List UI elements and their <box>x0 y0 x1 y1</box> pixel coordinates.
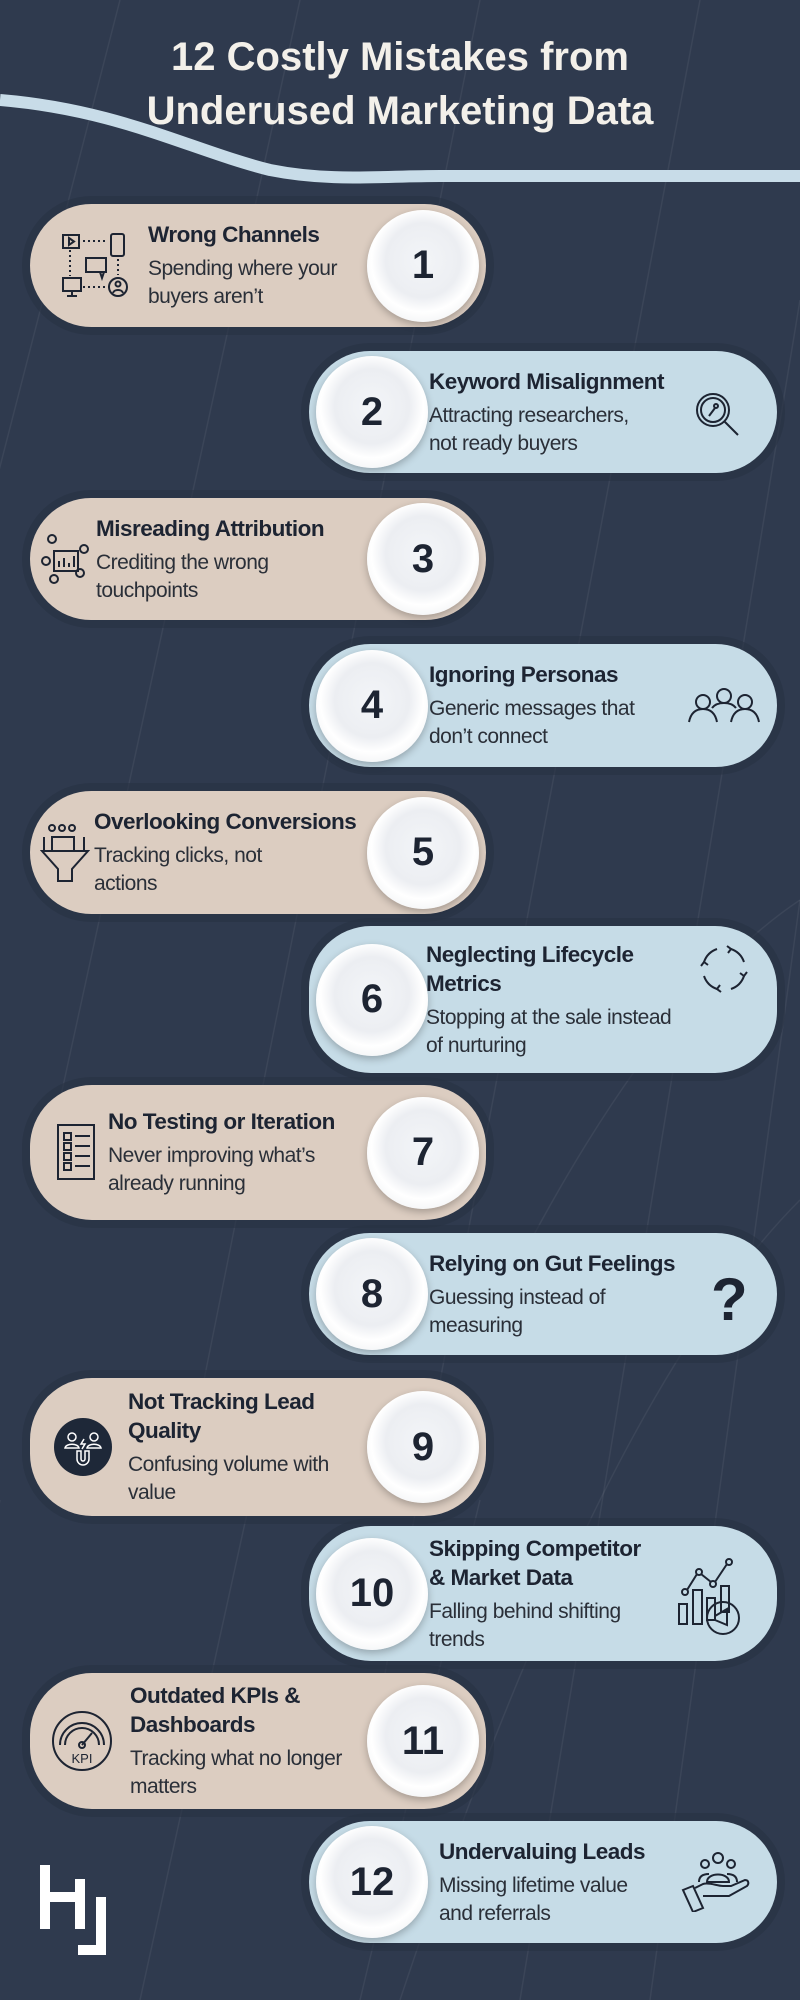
number: 6 <box>361 977 383 1021</box>
number: 9 <box>412 1424 434 1468</box>
text <box>439 1838 645 1924</box>
icon: attribution <box>41 534 89 584</box>
number <box>316 650 428 762</box>
text: Dashboards <box>130 1712 255 1737</box>
text: and referrals <box>439 1902 550 1924</box>
text <box>429 1536 641 1650</box>
card 3 <box>30 498 486 620</box>
text <box>94 809 356 895</box>
icon: lead magnet <box>54 1418 112 1476</box>
text: Missing lifetime value <box>439 1874 628 1896</box>
number <box>367 503 479 615</box>
text: Wrong Channels <box>148 222 319 247</box>
card 6 <box>309 926 777 1073</box>
icon: market chart <box>678 1558 740 1635</box>
number <box>367 1096 479 1208</box>
icon: cycle <box>700 945 748 993</box>
number <box>367 210 479 322</box>
text: Never improving what’s <box>108 1144 315 1167</box>
number: 10 <box>350 1571 394 1615</box>
text: of nurturing <box>426 1034 526 1056</box>
text: Not Tracking Lead <box>128 1389 315 1414</box>
title <box>147 35 654 133</box>
text: Generic messages that <box>429 697 634 720</box>
number <box>316 1538 428 1650</box>
text <box>426 942 671 1056</box>
number: 8 <box>361 1272 383 1316</box>
card 5 <box>30 791 486 914</box>
text: Skipping Competitor <box>429 1536 641 1560</box>
number <box>316 356 428 468</box>
icon: question mark: ? <box>711 1266 748 1333</box>
icon: channels <box>62 233 128 297</box>
icon: hand with people <box>682 1852 750 1912</box>
text: already running <box>108 1172 245 1195</box>
text <box>429 368 664 454</box>
text: measuring <box>429 1314 523 1336</box>
number: 11 <box>402 1718 444 1762</box>
text: Overlooking Conversions <box>94 809 356 834</box>
number: 7 <box>412 1130 434 1174</box>
card 10 <box>309 1526 777 1661</box>
text: touchpoints <box>96 578 198 602</box>
text: Keyword Misalignment <box>429 368 664 394</box>
card 9 <box>30 1378 486 1516</box>
card 12 <box>309 1821 777 1943</box>
title: Underused Marketing Data <box>147 89 653 133</box>
text: & Market Data <box>429 1564 573 1590</box>
number: 5 <box>412 830 434 874</box>
text: Falling behind shifting <box>429 1600 621 1622</box>
icon: personas <box>688 688 760 722</box>
card 8 <box>309 1233 777 1355</box>
text: Guessing instead of <box>429 1286 605 1308</box>
text <box>148 222 338 308</box>
number <box>367 1685 479 1797</box>
text: Neglecting Lifecycle <box>426 942 634 966</box>
number <box>367 1391 479 1503</box>
logo <box>40 1865 106 1955</box>
text: Metrics <box>426 970 501 996</box>
card 4 <box>309 644 777 767</box>
icon: KPI gauge: KPI <box>72 1751 92 1766</box>
number: 4 <box>361 683 383 727</box>
text: buyers aren’t <box>148 285 263 308</box>
number <box>367 796 479 908</box>
text: not ready buyers <box>429 432 577 454</box>
text: Outdated KPIs & <box>130 1683 300 1708</box>
text: actions <box>94 872 157 895</box>
text <box>429 1250 675 1336</box>
text: Spending where your <box>148 257 337 280</box>
text: Misreading Attribution <box>96 516 324 540</box>
text: value <box>128 1481 176 1504</box>
text: Ignoring Personas <box>429 662 618 687</box>
number: 1 <box>412 243 434 287</box>
number <box>316 944 428 1056</box>
text: matters <box>130 1775 197 1798</box>
text: Quality <box>128 1418 201 1443</box>
card 1 <box>30 204 486 327</box>
wave <box>0 94 800 184</box>
card 2 <box>309 351 777 473</box>
text: Confusing volume with <box>128 1453 329 1476</box>
title: 12 Costly Mistakes from <box>171 35 629 79</box>
text: Undervaluing Leads <box>439 1838 645 1864</box>
number: 3 <box>412 536 434 580</box>
icon: funnel <box>40 824 90 882</box>
text: don’t connect <box>429 725 547 748</box>
card 11 <box>30 1673 486 1809</box>
text: Tracking what no longer <box>130 1747 342 1770</box>
icon: checklist <box>57 1124 95 1180</box>
text <box>130 1683 342 1798</box>
icon: KPI gauge <box>52 1711 112 1771</box>
text: No Testing or Iteration <box>108 1109 335 1134</box>
text <box>108 1109 335 1195</box>
icon: magnifier <box>696 393 739 436</box>
number <box>316 1826 428 1938</box>
number: 2 <box>361 390 383 434</box>
text <box>429 662 635 748</box>
number: 12 <box>350 1860 394 1904</box>
text: Stopping at the sale instead <box>426 1006 671 1028</box>
text <box>128 1389 329 1504</box>
text: Tracking clicks, not <box>94 844 262 867</box>
text: trends <box>429 1628 484 1650</box>
text: Crediting the wrong <box>96 550 269 574</box>
text: Attracting researchers, <box>429 404 629 426</box>
card 7 <box>30 1085 486 1220</box>
text: Relying on Gut Feelings <box>429 1250 675 1276</box>
text <box>96 516 324 602</box>
number <box>316 1238 428 1350</box>
